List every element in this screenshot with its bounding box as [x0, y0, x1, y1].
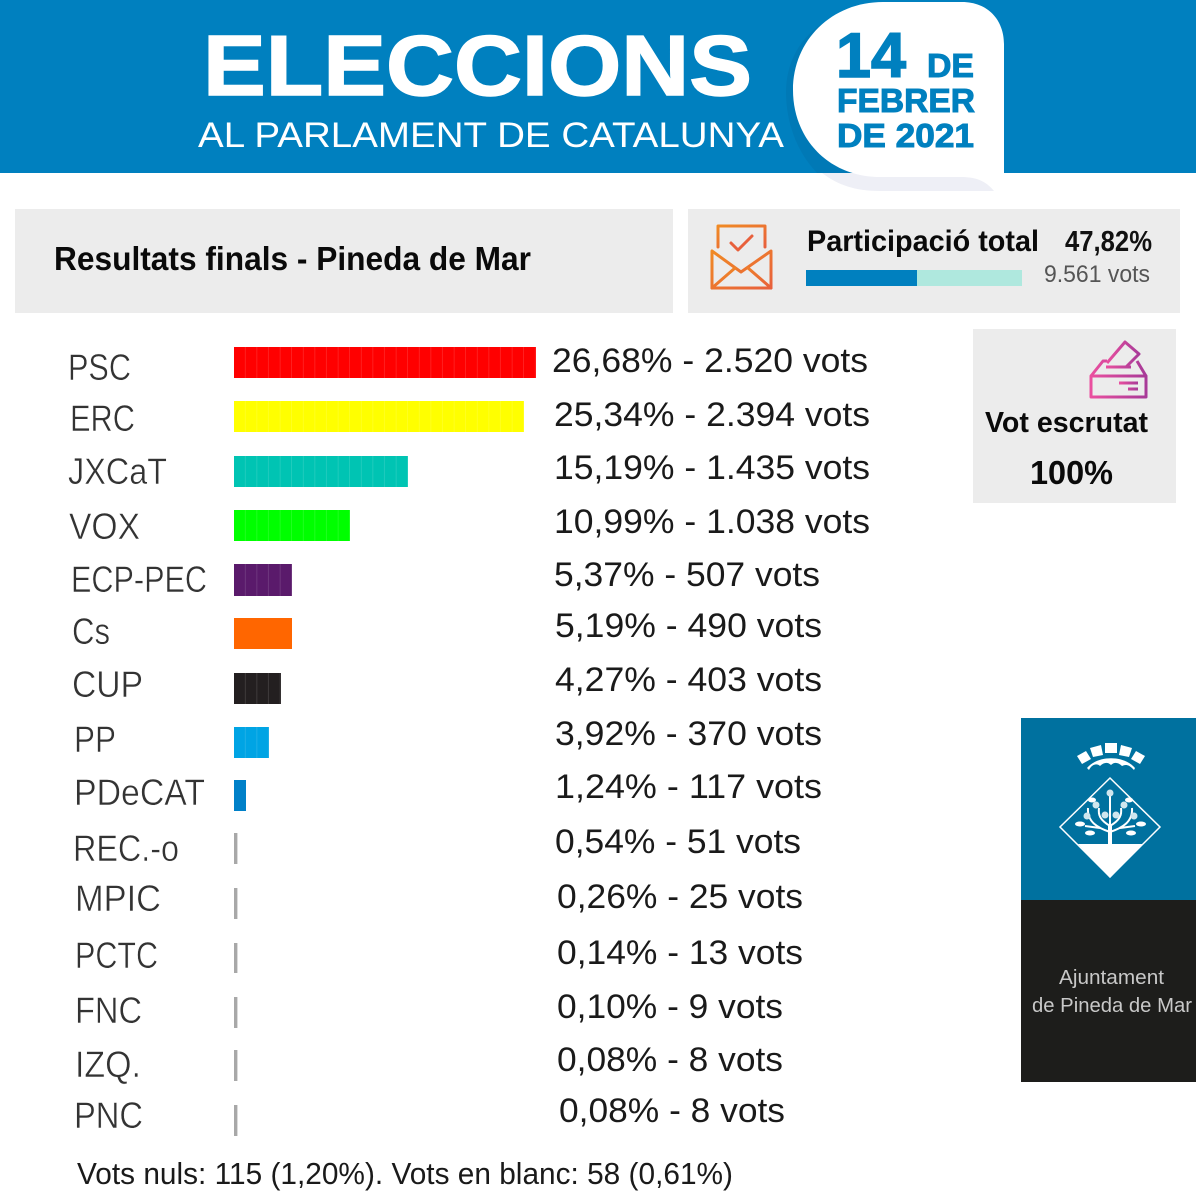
row: VOX: 10,99% - 1.038 vots: [554, 503, 870, 541]
logo: Ajuntament de Pineda de Mar: de Pineda de Mar: [1032, 995, 1192, 1017]
heading: Resultats finals - Pineda de Mar: [54, 240, 531, 277]
date speech bubble: DE: [927, 47, 974, 84]
row: ERC: [70, 396, 870, 439]
votes counted value: 100%: [1030, 454, 1113, 491]
row: JXCaT: [68, 449, 870, 492]
row: PDeCAT: [74, 768, 822, 813]
row: PSC: PSC: [68, 347, 131, 388]
row: REC.-o: REC.-o: [73, 828, 179, 869]
row: ECP-PEC: 5,37% - 507 vots: [554, 556, 820, 594]
header banner: [0, 0, 1196, 200]
row: PNC: 0,08% - 8 vots: [559, 1092, 785, 1130]
row: VOX: [69, 503, 870, 547]
icon: ballot box: [1091, 342, 1146, 397]
row: PP: [74, 715, 822, 760]
panel: results heading: [15, 209, 673, 313]
row: ECP-PEC: ECP-PEC: [71, 559, 207, 600]
row: JXCaT: 15,19% - 1.435 vots: [554, 449, 870, 487]
participation bar: [806, 270, 1022, 286]
participation label: Participació total: [807, 225, 1039, 258]
logo: Ajuntament de Pineda de Mar: [1021, 718, 1196, 1082]
subtitle: AL PARLAMENT DE CATALUNYA: [198, 116, 785, 155]
bar chart: results by party: [68, 342, 870, 1136]
row: Cs: [72, 607, 822, 652]
row: PP: 3,92% - 370 vots: [555, 715, 822, 753]
footer note: null and blank votes: Vots nuls: 115 (1,20%). Vots en blanc: 58 (0,61%): [77, 1156, 733, 1191]
row: CUP: 4,27% - 403 vots: [555, 661, 822, 699]
date speech bubble: DE 2021: [837, 117, 974, 154]
row: PDeCAT: 1,24% - 117 vots: [555, 768, 822, 806]
row: IZQ.: IZQ.: [75, 1044, 141, 1085]
participation votes: 9.561 vots: [1044, 261, 1150, 288]
row: PNC: PNC: [74, 1095, 143, 1136]
row: MPIC: [75, 878, 803, 919]
row: CUP: [72, 661, 822, 705]
row: PP: PP: [74, 719, 116, 760]
row: MPIC: MPIC: [75, 878, 161, 919]
votes counted label: Vot escrutat: [985, 407, 1148, 439]
row: IZQ.: 0,08% - 8 vots: [557, 1041, 783, 1079]
row: ERC: 25,34% - 2.394 vots: [554, 396, 870, 434]
row: JXCaT: JXCaT: [68, 451, 167, 492]
row: REC.-o: [73, 823, 801, 869]
date speech bubble: FEBRER: [837, 82, 975, 119]
row: Cs: Cs: [72, 611, 110, 652]
row: PNC: [74, 1092, 785, 1136]
row: FNC: 0,10% - 9 vots: [557, 988, 783, 1026]
icon: crown: [1077, 743, 1145, 770]
row: REC.-o: 0,54% - 51 vots: [555, 823, 801, 861]
date speech bubble: [786, 2, 1004, 200]
row: CUP: CUP: [72, 664, 143, 705]
row: PDeCAT: PDeCAT: [74, 772, 205, 813]
row: VOX: VOX: [69, 506, 140, 547]
row: IZQ.: [75, 1041, 783, 1085]
icon: envelope: [712, 226, 771, 288]
row: ERC: ERC: [70, 398, 135, 439]
row: PCTC: [75, 934, 803, 976]
logo text: Ajuntament: [1059, 967, 1164, 989]
row: Cs: 5,19% - 490 vots: [555, 607, 822, 645]
row: PSC: 26,68% - 2.520 vots: [552, 342, 868, 380]
participation percent: 47,82%: [1065, 226, 1152, 258]
row: FNC: FNC: [75, 990, 142, 1031]
row: PCTC: 0,14% - 13 vots: [557, 934, 803, 972]
title: ELECCIONS: [203, 19, 752, 114]
row: FNC: [75, 988, 783, 1031]
row: ECP-PEC: [71, 556, 820, 600]
panel: participation: [688, 209, 1180, 313]
row: PCTC: PCTC: [75, 935, 158, 976]
panel: votes counted: [973, 329, 1176, 503]
row: MPIC: 0,26% - 25 vots: [557, 878, 803, 916]
icon: shield with tree: [1060, 778, 1160, 878]
date text: 14: [836, 21, 906, 91]
row: PSC: [68, 342, 868, 388]
